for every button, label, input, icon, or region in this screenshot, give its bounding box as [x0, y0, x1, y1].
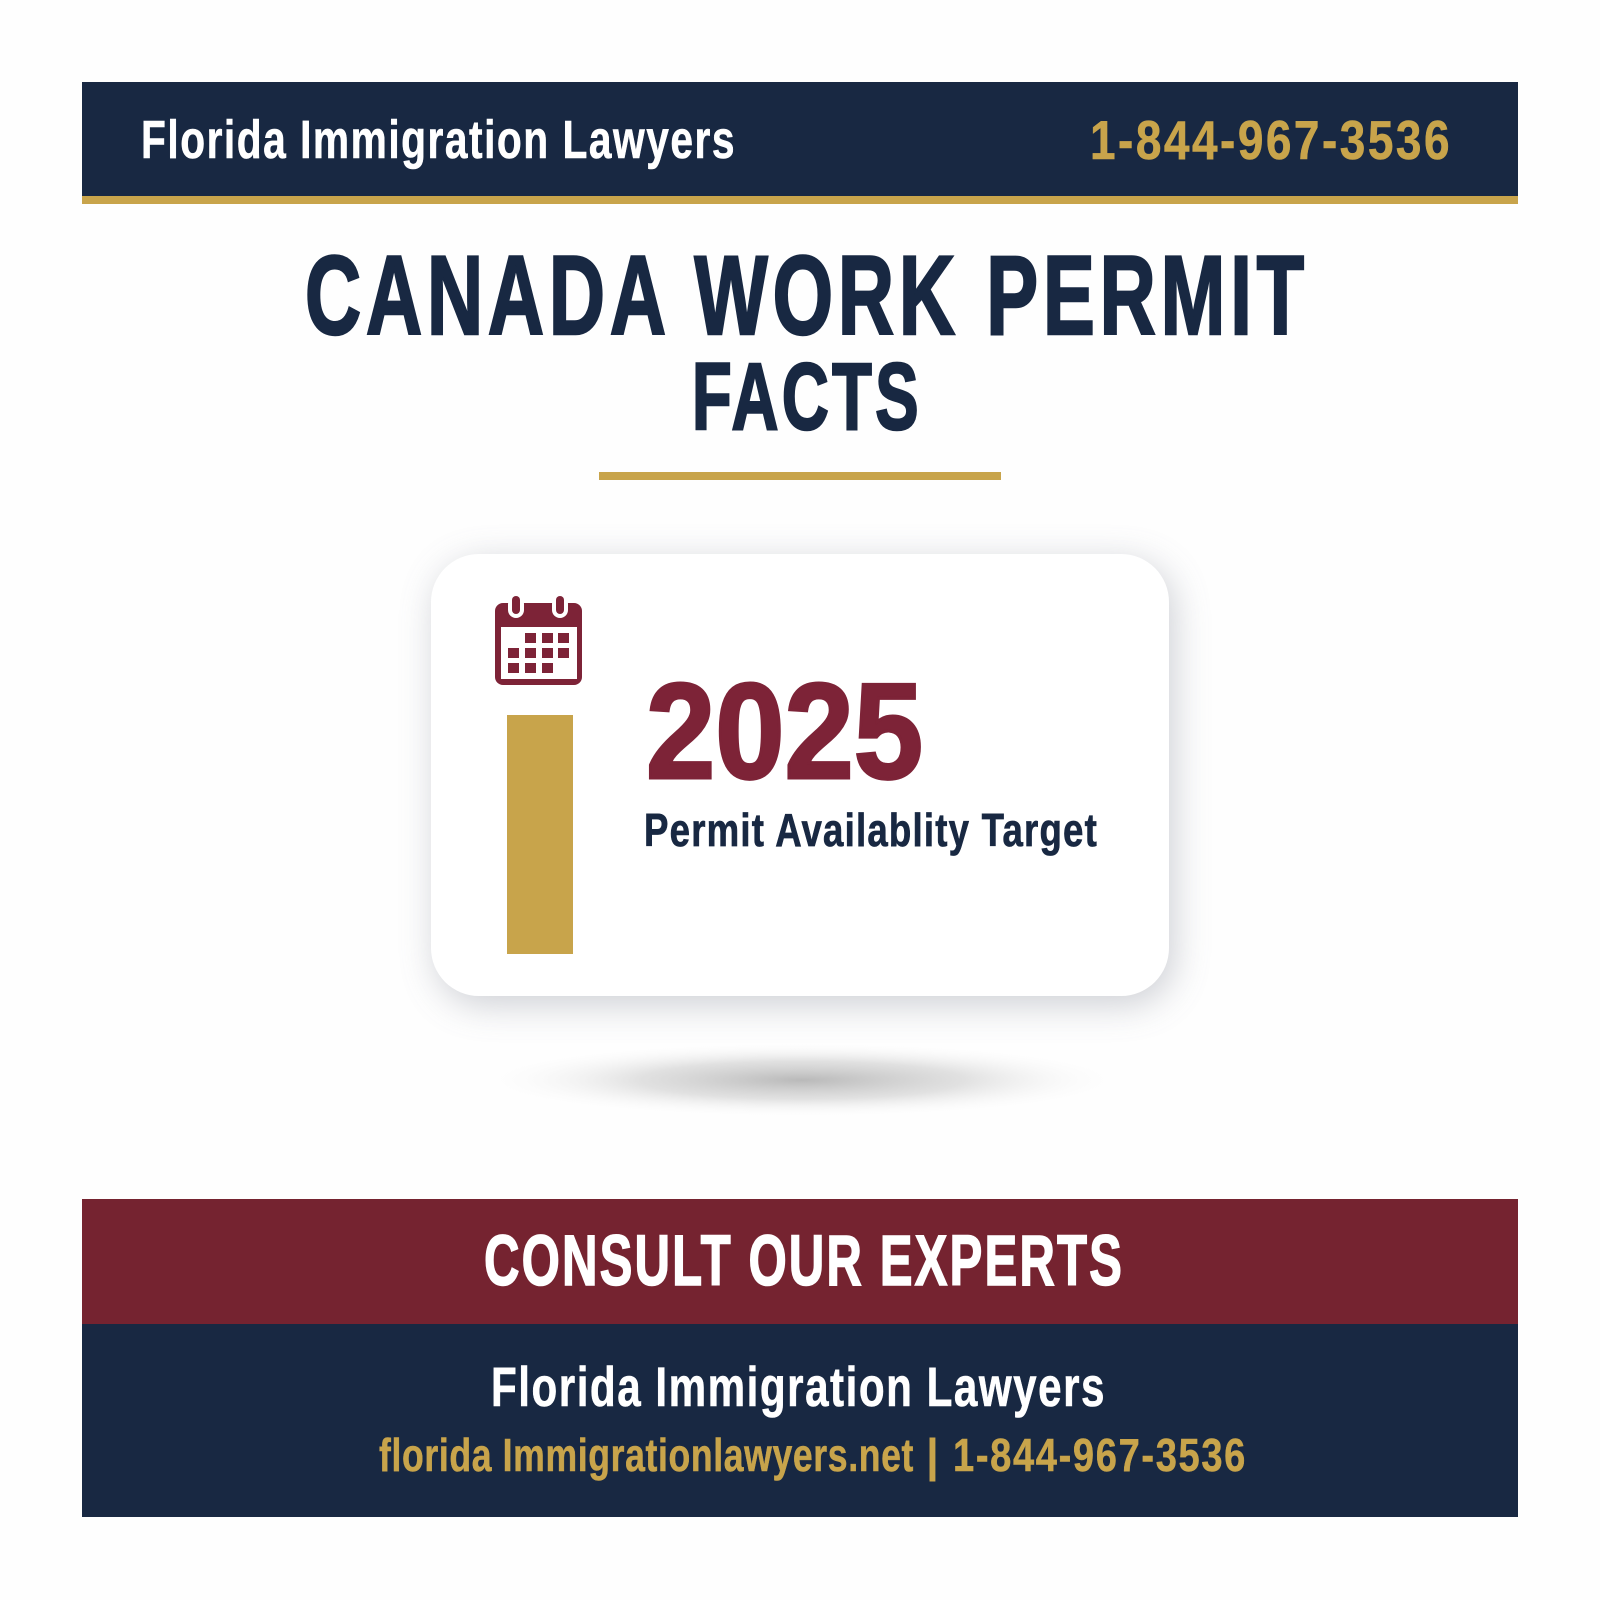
- stat value: 2025: [646, 655, 923, 807]
- footer contact line: |: [926, 1429, 939, 1481]
- header bar: [82, 82, 1518, 204]
- footer contact line: florida Immigrationlawyers.net: [379, 1429, 914, 1481]
- footer contact line: 1-844-967-3536: [953, 1429, 1247, 1481]
- card ground shadow: [477, 1042, 1127, 1118]
- subtitle: FACTS: [692, 344, 922, 450]
- title underline: [599, 472, 1001, 480]
- header firm name: Florida Immigration Lawyers: [141, 110, 736, 170]
- gold bar: [507, 715, 573, 954]
- header phone number: 1-844-967-3536: [1090, 109, 1452, 171]
- call to action text: CONSULT OUR EXPERTS: [484, 1222, 1124, 1301]
- call to action band: [82, 1199, 1518, 1325]
- icon: calendar: [495, 596, 582, 685]
- stat label: Permit Availablity Target: [644, 804, 1098, 856]
- card: 2025 stat: [431, 554, 1174, 1005]
- title: [305, 233, 1309, 450]
- footer firm name: Florida Immigration Lawyers: [491, 1355, 1106, 1418]
- footer panel: [82, 1324, 1518, 1517]
